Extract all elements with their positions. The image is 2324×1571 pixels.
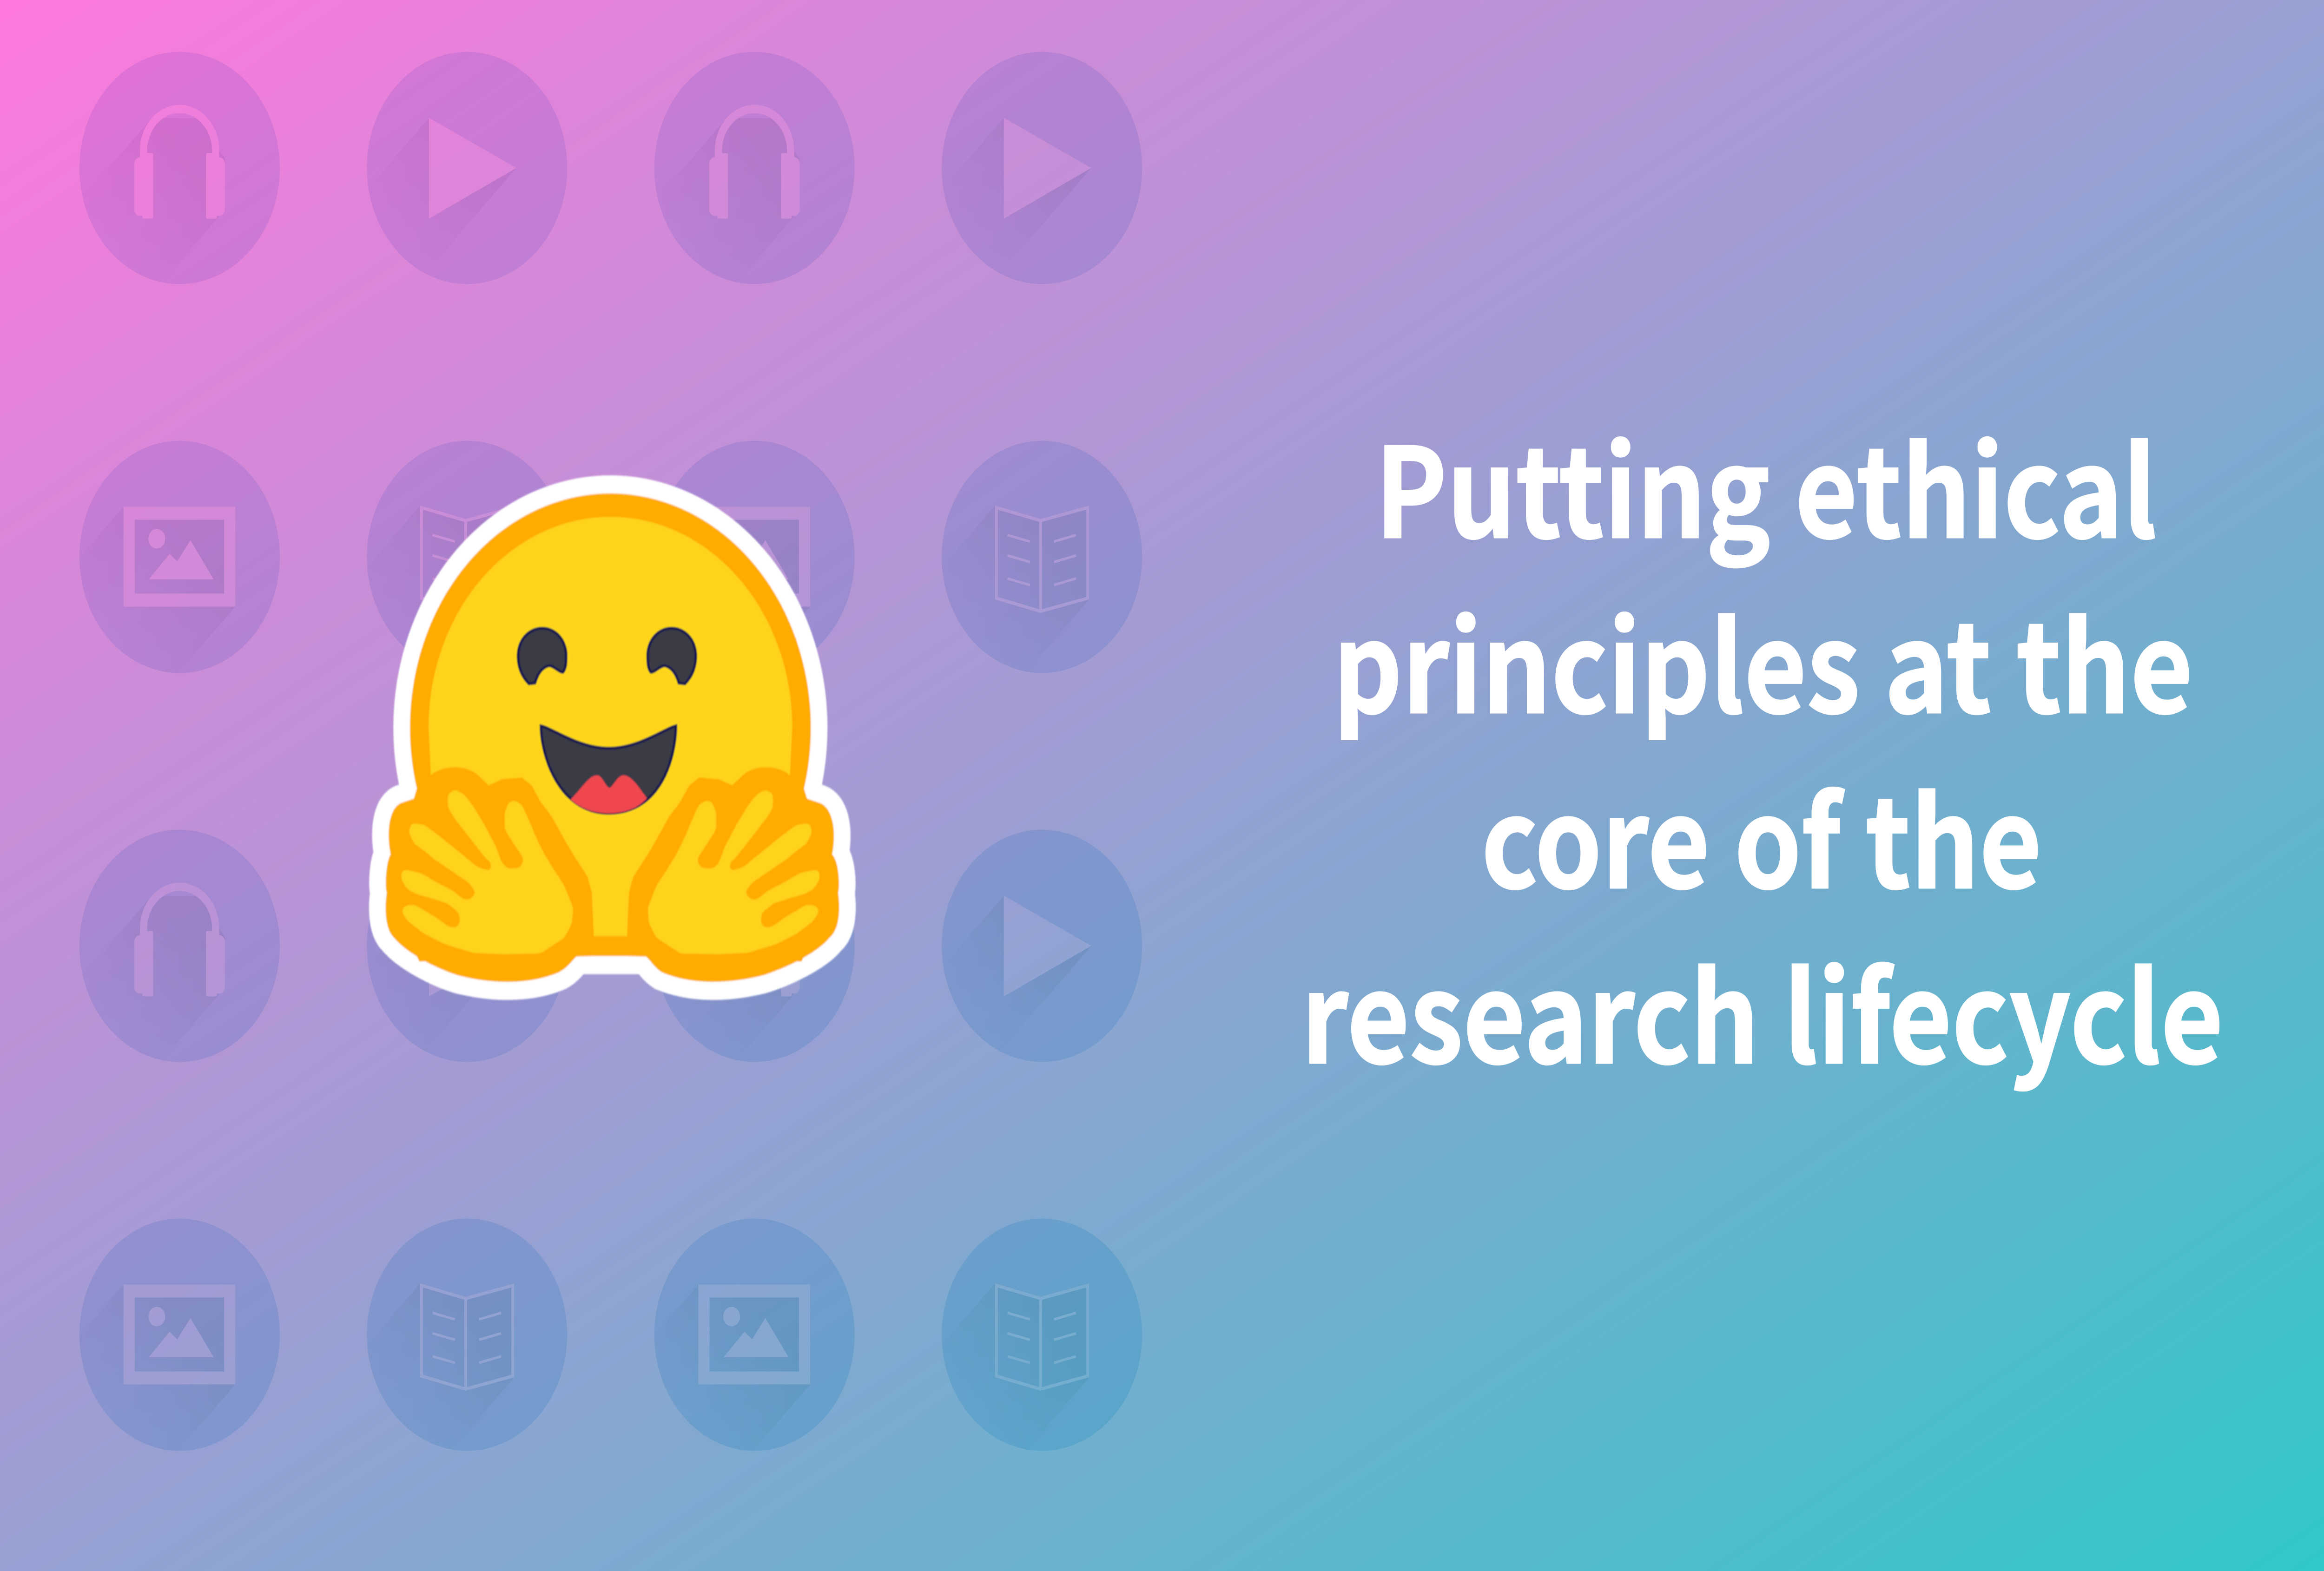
icon: book, row 2 column 2 bbox=[300, 440, 567, 739]
icon: image, row 4 column 3 bbox=[578, 1218, 855, 1524]
title line 3: core of the bbox=[1481, 744, 2042, 924]
tongue bbox=[570, 776, 647, 813]
icon: headphones, row 1 column 1 bbox=[31, 52, 280, 358]
icon grid bbox=[3, 52, 1142, 1524]
icon: play, row 1 column 2 bbox=[309, 52, 567, 308]
mascot white sticker outline bbox=[386, 493, 839, 982]
icon: headphones, row 1 column 3 bbox=[606, 52, 855, 358]
icon: book, row 4 column 2 bbox=[300, 1218, 567, 1517]
icon: image, row 2 column 3 bbox=[578, 440, 855, 746]
icon: play, row 3 column 2 bbox=[309, 830, 567, 1085]
icon: image, row 4 column 1 bbox=[3, 1218, 280, 1524]
title bbox=[1301, 394, 2224, 1099]
left eye bbox=[518, 628, 566, 684]
right hand bbox=[627, 767, 835, 961]
mascot orange outline bbox=[386, 493, 839, 982]
icon: book, row 4 column 4 bbox=[875, 1218, 1142, 1517]
icon: image, row 2 column 1 bbox=[3, 440, 280, 746]
icon: play, row 1 column 4 bbox=[884, 52, 1142, 308]
icon: headphones, row 3 column 1 bbox=[31, 830, 280, 1136]
icon: headphones, row 3 column 3 bbox=[606, 830, 855, 1136]
icon: play, row 3 column 4 bbox=[884, 830, 1142, 1085]
right eye bbox=[647, 628, 696, 684]
left hand bbox=[386, 767, 594, 961]
icon: book, row 2 column 4 bbox=[875, 440, 1142, 739]
mouth bbox=[541, 726, 676, 813]
title line 2: principles at the bbox=[1333, 569, 2193, 749]
mascot yellow face bbox=[429, 517, 792, 936]
title line 1: Putting ethical bbox=[1375, 394, 2157, 573]
icon: hugging face mascot bbox=[386, 493, 839, 982]
title line 4: research lifecycle bbox=[1301, 920, 2224, 1099]
